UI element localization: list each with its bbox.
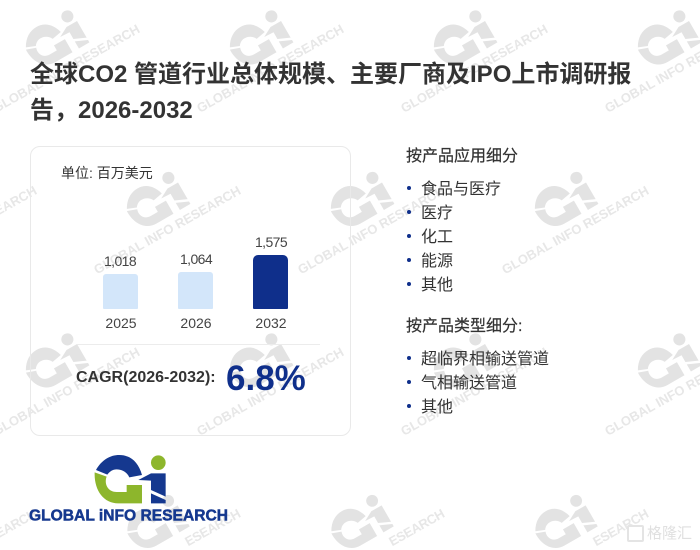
bar: 2032	[253, 255, 288, 309]
bar: 2025	[103, 274, 138, 309]
icon: source logo	[627, 525, 644, 542]
watermark pattern: GLOBAL INFO RESEARCH	[398, 21, 550, 116]
list: application segments: 化工	[421, 229, 453, 246]
watermark pattern: GLOBAL INFO RESEARCH	[295, 183, 447, 277]
title: 全球CO2 管道行业总体规模、主要厂商及IPO上市调研报	[30, 61, 631, 88]
year: 2026: 2026	[180, 315, 212, 331]
value: 2026: 1,064	[180, 251, 212, 267]
year: 2025: 2025	[105, 315, 137, 331]
heading: application segments: 按产品应用细分	[406, 148, 518, 165]
list: application segments: 医疗	[421, 205, 453, 222]
panel: market size card	[30, 146, 351, 436]
value: 2025: 1,018	[104, 253, 136, 269]
list: type segments: 超临界相输送管道	[421, 351, 549, 368]
watermark pattern: GLOBAL INFO RESEARCH	[499, 183, 651, 277]
title	[30, 61, 631, 124]
watermark pattern: GLOBAL INFO RESEARCH	[194, 21, 346, 116]
unit label: 单位: 百万美元	[61, 165, 153, 181]
CAGR label: CAGR(2026-2032):	[76, 369, 216, 386]
list: type segments: 气相输送管道	[421, 375, 517, 392]
watermark pattern: ESEARCH	[182, 506, 243, 549]
watermark pattern: ESEARCH	[386, 506, 447, 549]
heading: type segments: 按产品类型细分:	[406, 318, 522, 335]
list: type segments: 其他	[421, 399, 453, 416]
list: application segments	[407, 180, 501, 294]
list: application segments: 其他	[421, 277, 453, 294]
CAGR value: 6.8%	[226, 359, 306, 398]
value: 2032: 1,575	[255, 234, 287, 250]
watermark pattern: GLOBAL INFO RESEARCH	[398, 344, 550, 439]
list: application segments: 能源	[421, 253, 453, 270]
watermark pattern: ESEARCH	[590, 506, 651, 549]
year: 2032: 2032	[255, 315, 287, 331]
bar: 2026	[178, 272, 213, 309]
list: application segments: 食品与医疗	[421, 181, 501, 198]
watermark pattern: GLOBAL INFO RESEARCH	[194, 344, 346, 439]
logo: Global Info Research: GLOBAL iNFO RESEARCH	[29, 508, 228, 524]
list: type segments	[407, 350, 549, 416]
source name: 格隆汇	[647, 525, 692, 542]
watermark pattern: GLOBAL INFO RESEARCH	[91, 183, 243, 277]
source mark	[627, 525, 692, 542]
title: 告，2026-2032	[30, 97, 193, 124]
